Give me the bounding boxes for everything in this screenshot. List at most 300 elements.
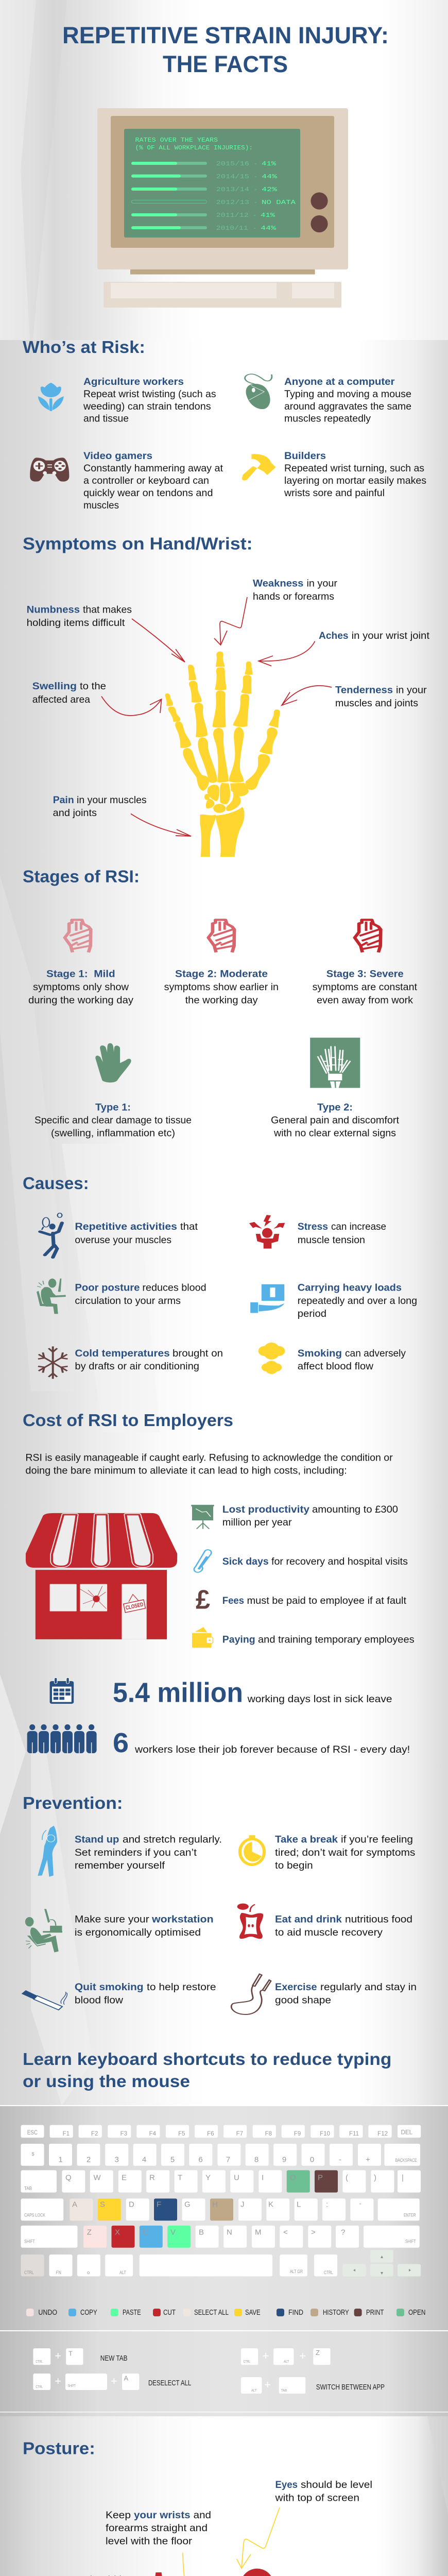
arrow: weakness	[214, 597, 247, 645]
shortcut: ctrl alt z: +	[299, 2349, 306, 2362]
text: is ergonomically optimised	[75, 1927, 201, 1938]
text: that	[180, 1221, 198, 1232]
key row: qwerty: |	[402, 2174, 404, 2182]
text: to aid muscle recovery	[275, 1927, 383, 1938]
text: Stage 3: Severe	[326, 969, 404, 980]
illustration: closed shop	[26, 1513, 177, 1639]
tip: eat and drink	[237, 1904, 412, 1939]
key row: asdf: K	[268, 2200, 273, 2209]
bar 2011/12	[131, 212, 275, 219]
key row: numbers	[21, 2144, 420, 2166]
text: the working day	[185, 994, 258, 1006]
arrow: eyes	[237, 2507, 280, 2568]
callout: tenderness	[335, 685, 427, 709]
text	[284, 450, 426, 499]
item: agriculture workers	[38, 376, 216, 425]
cause: poor posture	[37, 1279, 206, 1314]
heading: Prevention:	[23, 1793, 123, 1812]
legend: shortcut colours: COPY	[80, 2309, 97, 2317]
key row: numbers: 6	[198, 2156, 203, 2164]
title: THE FACTS	[163, 51, 288, 77]
stage 1	[28, 920, 133, 1006]
text: (swelling, inflammation etc)	[51, 1127, 175, 1139]
key row: qwerty: P	[318, 2174, 323, 2182]
key row: function keys: DEL	[401, 2130, 413, 2136]
hand skeleton illustration	[165, 652, 280, 857]
stage 2	[164, 920, 279, 1006]
text: by drafts or air conditioning	[75, 1361, 199, 1372]
callout: eyes	[274, 2479, 372, 2503]
text: million per year	[222, 1517, 292, 1528]
text: Sick days	[222, 1556, 269, 1567]
text: amounting to £300	[312, 1504, 398, 1515]
text: workstation	[151, 1914, 214, 1925]
monitor screen	[124, 129, 300, 238]
key row: qwerty: (	[346, 2174, 348, 2182]
callout: weakness: in your	[307, 578, 338, 589]
shortcut: ctrl alt z: ALT	[284, 2360, 289, 2364]
key row: function keys: F11	[349, 2131, 359, 2137]
item: anyone at a computer	[245, 374, 411, 425]
callout: eyes: Eyes	[275, 2479, 298, 2490]
key row: bottom	[21, 2250, 421, 2276]
shortcut: deselect all: A	[124, 2374, 129, 2382]
icon: cigarette	[22, 1990, 67, 2010]
text: affect blood flow	[298, 1361, 374, 1372]
text: Lost productivity	[222, 1504, 309, 1515]
heading: Cost of RSI to Employers	[23, 1411, 233, 1430]
key row: qwerty: U	[234, 2174, 239, 2182]
text	[298, 1348, 406, 1372]
bar 2012/13	[132, 199, 296, 206]
callout: wrists: Keep	[106, 2510, 131, 2521]
key row: qwerty: Y	[205, 2174, 211, 2182]
callout: wrists	[106, 2510, 211, 2547]
key row: bottom: o	[87, 2270, 90, 2276]
key row: zxcv: Z	[87, 2228, 92, 2237]
cost: sick days	[194, 1550, 408, 1572]
text: Cold temperatures	[75, 1348, 170, 1359]
key row: function keys: F8	[265, 2131, 272, 2137]
closed sign	[124, 1595, 145, 1613]
heading: Symptoms on Hand/Wrist:	[23, 534, 253, 553]
icon: calendar	[50, 1677, 74, 1704]
key row: function keys: F3	[120, 2131, 127, 2137]
shortcut: ctrl alt z: Z	[316, 2349, 320, 2357]
text	[164, 969, 279, 1006]
shortcut: ctrl alt z: +	[263, 2349, 269, 2362]
key row: function keys: F6	[207, 2131, 214, 2137]
text: Make sure your	[75, 1914, 149, 1925]
shortcut: new tab	[33, 2348, 128, 2365]
callout: numbness: holding items difficult	[27, 617, 125, 629]
key row: asdf: :	[326, 2200, 328, 2209]
shortcut examples	[33, 2348, 385, 2394]
text: can increase	[331, 1221, 386, 1232]
bar 2012/13: NO DATA	[262, 199, 296, 206]
intro text	[25, 1452, 393, 1476]
text: and training temporary employees	[258, 1634, 415, 1646]
arrow: numbness	[132, 619, 185, 662]
text: repeatedly and over a long	[298, 1295, 417, 1307]
text: muscles	[83, 500, 119, 511]
text: symptoms show earlier in	[164, 981, 279, 993]
text: Specific and clear damage to tissue	[35, 1115, 192, 1126]
key row: function keys: F7	[236, 2131, 243, 2137]
icon: stressed person	[249, 1215, 285, 1248]
monitor stand	[130, 269, 315, 275]
icon: presentation chart	[191, 1505, 214, 1529]
text: for recovery and hospital visits	[271, 1556, 408, 1567]
shortcut: new tab: T	[68, 2350, 73, 2358]
text: brought on	[173, 1348, 223, 1359]
key row: zxcv: ?	[341, 2228, 345, 2237]
bar 2013/14: -	[254, 186, 257, 193]
key row: asdf: J	[240, 2200, 244, 2209]
key row: asdf: "	[359, 2203, 361, 2208]
bar 2012/13: 2012/13	[216, 199, 249, 206]
text	[275, 1981, 417, 2006]
callout: numbness: Numbness	[27, 604, 80, 615]
bar 2011/12: -	[253, 212, 256, 219]
icon: smoke clouds	[259, 1343, 285, 1374]
tip: workstation	[25, 1909, 214, 1952]
key row: zxcv: SHIFT	[405, 2239, 416, 2244]
cost: lost productivity	[191, 1504, 398, 1529]
chart title	[135, 137, 253, 151]
heading: Causes:	[23, 1174, 89, 1193]
icon: bandaged hand dark	[355, 920, 381, 953]
key row: qwerty: O	[290, 2174, 296, 2182]
key row: asdf: A	[72, 2200, 77, 2209]
callout: numbness	[27, 604, 132, 629]
tip: exercise	[231, 1974, 417, 2014]
key row: numbers: 2	[87, 2156, 91, 2164]
text: Take a break	[275, 1834, 338, 1845]
callout: screen	[23, 2574, 131, 2576]
monitor bezel	[111, 116, 334, 248]
keyboard diagram	[21, 2125, 421, 2276]
text	[222, 1504, 398, 1528]
title: REPETITIVE STRAIN INJURY:	[62, 22, 389, 48]
shortcut: switch between app: +	[264, 2378, 271, 2391]
key row: numbers: -	[339, 2156, 341, 2164]
icon: hammer	[242, 454, 276, 481]
heading: keyboard shortcuts: Learn keyboard shortcuts to reduce typing	[23, 2049, 391, 2069]
icon: game controller	[30, 457, 69, 482]
key row: qwerty: TAB	[24, 2186, 32, 2192]
callout: swelling: Swelling	[32, 681, 77, 692]
key row: function keys: F1	[63, 2131, 70, 2137]
stat: working days lost	[50, 1677, 392, 1708]
text: a controller or keyboard can	[83, 475, 209, 486]
key row: numbers: 5	[170, 2156, 175, 2164]
legend: shortcut colours: SELECT ALL	[194, 2309, 229, 2317]
arrow: aches	[259, 641, 315, 666]
icon: slouching person	[37, 1279, 66, 1314]
shortcut: deselect all: CTRL	[36, 2385, 43, 2389]
item: video gamers	[30, 450, 223, 511]
text: blood flow	[75, 1995, 124, 2006]
bar 2014/15	[131, 173, 278, 180]
legend: shortcut colours: UNDO	[38, 2309, 57, 2317]
key row: zxcv	[21, 2226, 420, 2248]
shortcut: new tab: NEW TAB	[100, 2354, 128, 2363]
key row: zxcv: >	[311, 2228, 316, 2237]
text	[75, 1914, 214, 1938]
callout: pain: and joints	[53, 807, 97, 819]
key row: numbers: 0	[310, 2156, 314, 2164]
icon: bandaged hand medium	[209, 920, 234, 953]
heading: Who’s at Risk:	[23, 337, 145, 357]
text	[83, 376, 216, 425]
callout: wrists: and	[194, 2510, 211, 2521]
callout: swelling: to the	[80, 681, 106, 692]
text: Stage 2: Moderate	[175, 969, 268, 980]
key row: asdf: CAPS LOCK	[24, 2213, 45, 2218]
arrow: swelling	[101, 697, 162, 716]
text: Repeated wrist turning, such as	[284, 463, 424, 474]
icon: tulip	[38, 383, 64, 411]
text: Exercise	[275, 1981, 317, 1993]
callout: tenderness: Tenderness	[335, 685, 393, 696]
text: Typing and moving a mouse	[284, 388, 411, 400]
tip: stand up	[38, 1826, 222, 1877]
callout: wrists: forearms straight and	[106, 2522, 208, 2534]
icon: wallet	[192, 1627, 213, 1648]
text: Agriculture workers	[83, 376, 184, 387]
intro text: RSI is easily manageable if caught early. Refusing to acknowledge the condition or	[25, 1452, 393, 1463]
stage 3	[313, 920, 418, 1006]
key row: qwerty	[21, 2170, 421, 2193]
key row: bottom: FN	[56, 2270, 61, 2276]
text: Builders	[284, 450, 326, 462]
text: Repeat wrist twisting (such as	[83, 388, 216, 400]
legend: shortcut colours: CUT	[163, 2309, 176, 2317]
cause: carrying heavy loads	[250, 1282, 417, 1319]
callout: pain: in your muscles	[77, 794, 147, 806]
closed sign: CLOSED	[125, 1601, 144, 1611]
key row: bottom: ALT	[119, 2270, 126, 2276]
key row: numbers: 4	[142, 2156, 146, 2164]
callout: aches: in your wrist joint	[352, 630, 430, 641]
key row: numbers: 3	[115, 2156, 119, 2164]
text: Stage 1: Mild	[46, 969, 115, 980]
key row: zxcv: C	[143, 2228, 148, 2237]
bar 2012/13: -	[254, 199, 257, 206]
section: causes	[23, 1174, 417, 1379]
callout: numbness: that makes	[83, 604, 132, 615]
section: posture	[23, 2439, 430, 2576]
key row: function keys: F12	[377, 2131, 388, 2137]
bar 2015/16	[131, 160, 277, 167]
key row: asdf: F	[157, 2200, 161, 2209]
text: overuse your muscles	[75, 1234, 171, 1246]
key row: asdf: D	[129, 2200, 134, 2209]
text: Set reminders if you can’t	[75, 1847, 197, 1858]
key row: zxcv: V	[170, 2228, 176, 2237]
bar 2015/16: 2015/16	[216, 160, 249, 167]
bar 2010/11: -	[253, 225, 256, 232]
key row: asdf: H	[212, 2200, 218, 2209]
text: Smoking	[298, 1348, 342, 1359]
cost: paying	[192, 1627, 415, 1648]
key row: numbers: 1	[58, 2156, 63, 2164]
stat text: workers lose their job forever because of RSI - every day!	[134, 1744, 410, 1755]
shortcut: deselect all: +	[111, 2375, 117, 2387]
callout: eyes: should be level	[301, 2479, 372, 2490]
key row: qwerty: )	[374, 2174, 376, 2182]
section: prevention	[22, 1793, 417, 2014]
text: period	[298, 1308, 326, 1319]
text: Repetitive activities	[75, 1221, 177, 1232]
key row: zxcv: X	[115, 2228, 120, 2237]
shortcut: deselect all: DESELECT ALL	[148, 2379, 191, 2387]
type 1	[35, 1043, 192, 1139]
key row: zxcv: N	[227, 2228, 232, 2237]
cause: repetitive activities	[40, 1213, 198, 1258]
icon: bandaged hand light	[65, 920, 91, 953]
icon: pound sign: £	[196, 1585, 210, 1615]
arrow: wrists	[183, 2553, 194, 2576]
text: wrists sore and painful	[284, 487, 385, 499]
text: quickly wear on tendons and	[83, 487, 213, 499]
legend: shortcut colours: HISTORY	[323, 2309, 349, 2317]
text	[298, 1221, 386, 1246]
heading: keyboard shortcuts: or using the mouse	[23, 2072, 190, 2091]
heading: keyboard shortcuts	[23, 2049, 391, 2091]
callout: pain: Pain	[53, 794, 74, 806]
bar 2015/16: -	[254, 160, 257, 167]
key row: asdf: G	[184, 2200, 191, 2209]
shortcut: switch between app: SWITCH BETWEEN APP	[316, 2383, 385, 2392]
text: tired; don’t wait for symptoms	[275, 1847, 416, 1858]
text	[75, 1981, 216, 2006]
monitor casing	[97, 108, 348, 269]
panel: keyboard band	[0, 2105, 448, 2416]
text: Poor posture	[75, 1282, 140, 1294]
text: to begin	[275, 1860, 313, 1871]
key row: qwerty: E	[122, 2174, 127, 2182]
monitor knobs	[311, 192, 328, 232]
icon: resistance band	[231, 1974, 271, 2014]
text	[75, 1834, 222, 1871]
text: to help restore	[147, 1981, 216, 1993]
bar 2010/11: 44%	[261, 225, 277, 232]
key row: bottom: ALT GR	[290, 2269, 303, 2275]
text	[35, 1101, 192, 1139]
stat text: working days lost in sick leave	[247, 1693, 392, 1705]
text: Eat and drink	[275, 1914, 342, 1925]
tip: quit smoking	[22, 1981, 216, 2010]
key row: numbers: +	[366, 2156, 370, 2164]
item: builders	[242, 450, 426, 499]
arrow: tenderness	[282, 686, 332, 705]
heading: Stages of RSI:	[23, 867, 140, 886]
text: weeding) can strain tendons	[83, 401, 211, 412]
key row: zxcv: B	[199, 2228, 204, 2237]
icon: apple core	[237, 1904, 263, 1939]
text	[83, 450, 223, 511]
section: symptoms	[23, 534, 430, 857]
callout: swelling: affected area	[32, 694, 90, 705]
key row: bottom: CTRL	[324, 2270, 333, 2276]
callout: tenderness: in your	[396, 685, 427, 696]
chart title: (% OF ALL WORKPLACE INJURIES):	[135, 144, 253, 151]
legend: shortcut colours	[26, 2309, 425, 2317]
key row: function keys: ESC	[27, 2129, 38, 2136]
cause: smoking	[259, 1343, 406, 1374]
bar 2015/16: 41%	[262, 160, 277, 167]
text: must be paid to employee if at fault	[247, 1595, 407, 1606]
callout: wrists: level with the floor	[106, 2535, 193, 2547]
text: Constantly hammering away at	[83, 463, 223, 474]
callout: aches: Aches	[319, 630, 349, 641]
bar 2013/14: 2013/14	[216, 186, 249, 193]
big number: 6	[113, 1727, 129, 1758]
callout: weakness: hands or forearms	[253, 591, 334, 602]
callout: weakness	[253, 578, 338, 602]
text: remember yourself	[75, 1860, 165, 1871]
text	[284, 376, 411, 425]
chart title: RATES OVER THE YEARS	[135, 137, 218, 144]
shortcut: ctrl alt z: CTRL	[244, 2360, 250, 2364]
text	[275, 1914, 412, 1938]
cost: fees	[196, 1585, 407, 1615]
shortcut: switch between app: TAB	[281, 2389, 287, 2393]
text	[28, 969, 133, 1006]
bar 2014/15: 44%	[262, 173, 278, 180]
bar 2011/12: 2011/12	[216, 212, 249, 219]
callout: pain	[53, 794, 147, 819]
text: Fees	[222, 1595, 244, 1606]
text: regularly and stay in	[320, 1981, 417, 1993]
icon: hand	[95, 1043, 131, 1082]
bar 2014/15: -	[254, 173, 257, 180]
shortcut: switch between app: ALT	[251, 2389, 257, 2393]
section: stages of RSI	[23, 867, 418, 1139]
icon: computer mouse	[245, 374, 272, 409]
key row: numbers: 7	[226, 2156, 230, 2164]
text: General pain and discomfort	[271, 1115, 400, 1126]
computer base unit	[104, 282, 341, 308]
key row: function keys: F2	[91, 2131, 98, 2137]
icon: person at workstation	[25, 1909, 62, 1952]
text: Carrying heavy loads	[298, 1282, 402, 1294]
key row: zxcv: M	[255, 2228, 262, 2237]
text: nutritious food	[345, 1914, 412, 1925]
shortcut: new tab: CTRL	[36, 2360, 43, 2364]
bar 2014/15: 2014/15	[216, 173, 249, 180]
key row: zxcv: <	[283, 2228, 288, 2237]
key row: qwerty: W	[94, 2174, 101, 2182]
computer chart: rates over the years	[97, 108, 348, 308]
shortcut: deselect all: SHIFT	[68, 2384, 76, 2388]
key row: zxcv: SHIFT	[24, 2239, 35, 2244]
legend: shortcut colours: PASTE	[123, 2309, 141, 2317]
key row: function keys	[21, 2125, 421, 2138]
icon: stretching figure	[38, 1826, 57, 1877]
text: Type 1:	[95, 1101, 131, 1113]
shortcut: deselect all: +	[55, 2375, 61, 2387]
key row: function keys: F5	[178, 2131, 185, 2137]
key row: numbers: 8	[254, 2156, 259, 2164]
text	[75, 1282, 206, 1307]
key row: asdf: L	[297, 2200, 301, 2209]
cause: stress	[249, 1215, 386, 1248]
text: Quit smoking	[75, 1981, 144, 1993]
key row: asdf	[21, 2198, 420, 2221]
